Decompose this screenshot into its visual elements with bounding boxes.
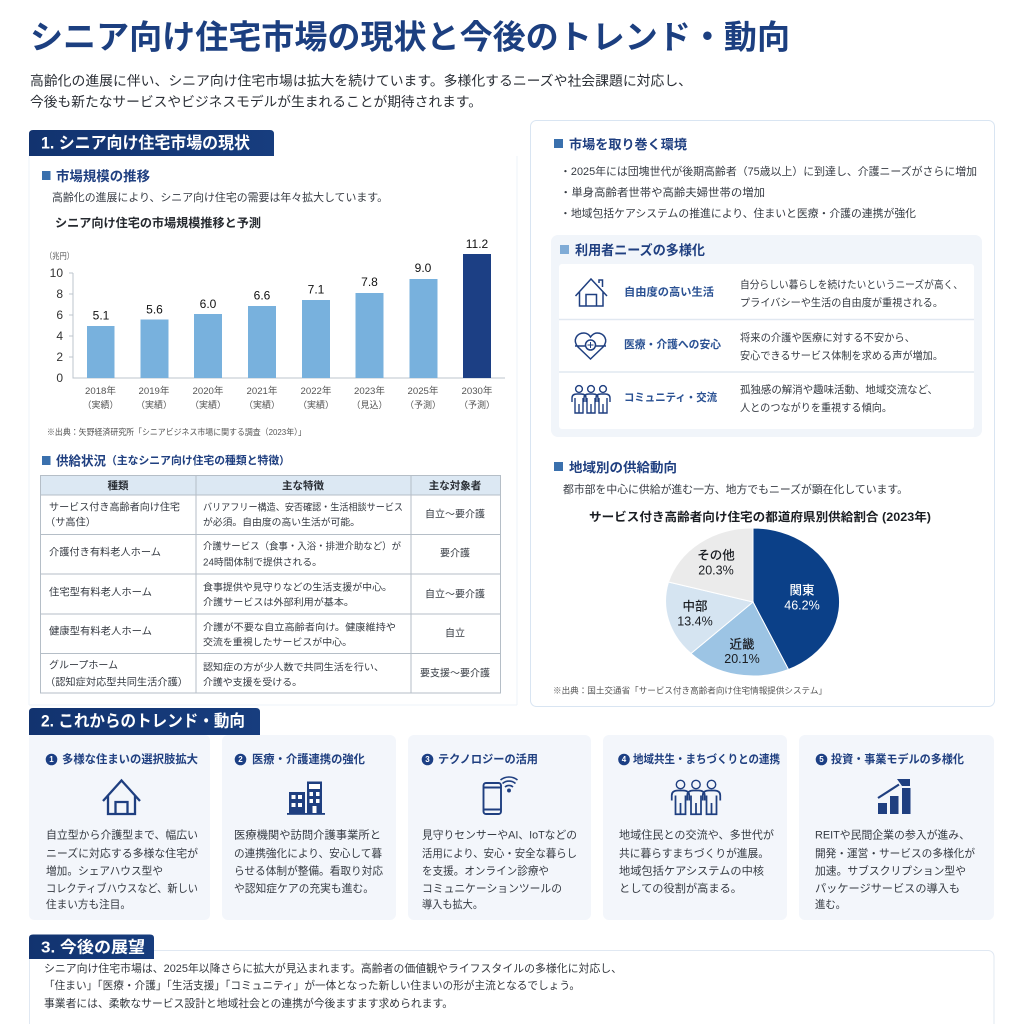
card 1 text: 増加。シェアハウス型や <box>46 864 163 878</box>
need: community <box>572 383 938 414</box>
subheading: regional supply: 地域別の供給動向 <box>569 460 677 475</box>
card 1 text: 自立型から介護型まで、幅広い <box>46 828 198 842</box>
card 2 text: らせる体制が整備。看取り対応 <box>234 864 383 878</box>
icon: people <box>572 386 610 413</box>
table column: features: 24時間体制で提供される。 <box>203 556 322 569</box>
y axis <box>45 251 505 385</box>
icon: growth chart <box>878 779 910 814</box>
slice labels: 関東 <box>789 583 815 598</box>
bar values: 11.2 <box>466 237 489 251</box>
table column: features <box>203 501 403 689</box>
chart title: シニア向け住宅の市場規模推移と予測 <box>55 215 261 230</box>
card 3 text: コミュニケーションツールの <box>422 882 562 895</box>
subheading: supply: （主なシニア向け住宅の種類と特徴） <box>106 453 290 467</box>
table column: features: 認知症の方が少人数で共同生活を行い、 <box>203 661 384 674</box>
section 2 header: 2. これからのトレンド・動向 <box>41 712 245 731</box>
icon: people <box>672 780 720 814</box>
card 4 text: 地域住民との交流や、多世代が <box>619 828 774 842</box>
icon: building <box>287 782 325 815</box>
chart source: ※出典：矢野経済研究所「シニアビジネス市場に関する調査（2023年）」 <box>47 427 306 437</box>
bar values: 5.1 <box>93 309 110 323</box>
slice labels: 中部 <box>682 599 708 614</box>
subheading: market size: 市場規模の推移 <box>56 168 150 184</box>
x axis labels: 2025年 <box>408 385 439 397</box>
card 3 heading: 3 <box>425 755 430 764</box>
x axis labels: （予測） <box>459 399 495 410</box>
bar values: 7.8 <box>361 275 378 289</box>
card 4: community development <box>603 735 787 920</box>
table column: type: （認知症対応型共同生活介護） <box>45 676 188 689</box>
card 5 text: 進む。 <box>815 898 846 911</box>
slice labels: 近畿 <box>729 637 755 652</box>
table column: target: 自立 <box>445 627 465 640</box>
card 3 text: 活用により、安心・安全な暮らし <box>422 846 577 860</box>
slice labels: 13.4% <box>677 615 713 629</box>
bar values: 6.6 <box>254 289 271 303</box>
card 5 text <box>815 828 975 911</box>
table column: type: グループホーム <box>49 659 118 672</box>
pie chart: supply share <box>666 528 840 676</box>
section 2 header <box>29 708 260 735</box>
outlook text: 「住まい」「医療・介護」「生活支援」「コミュニティ」が一体となった新しい住まいの形が主流となるでしょう。 <box>44 978 580 992</box>
y axis: （兆円） <box>45 251 74 261</box>
environment bullets <box>560 165 977 220</box>
table column: target: 要介護 <box>440 547 470 560</box>
slice labels: 20.1% <box>724 652 760 666</box>
subheading: supply <box>42 453 290 469</box>
table column: target <box>420 508 490 680</box>
section 1 header: 1. シニア向け住宅市場の現状 <box>41 133 250 153</box>
table column: features: 食事提供や見守りなどの生活支援が中心。 <box>203 581 392 594</box>
card 4 text <box>619 828 774 895</box>
panel: right column <box>530 120 994 706</box>
card 3 text: を支援。オンライン診療や <box>422 864 549 878</box>
need: medical care: 安心できるサービス体制を求める声が増加。 <box>740 349 943 362</box>
y axis: 0 <box>56 371 63 385</box>
table column: type: 健康型有料老人ホーム <box>49 625 152 638</box>
user needs heading: 利用者ニーズの多様化 <box>575 242 705 258</box>
outlook text <box>44 961 622 1010</box>
need: freedom: プライバシーや生活の自由度が重視される。 <box>740 296 943 309</box>
icon: heart <box>575 333 606 359</box>
card 1 text: 住まい方も注目。 <box>46 897 131 911</box>
table column: features: バリアフリー構造、安否確認・生活相談サービス <box>203 501 403 514</box>
table column: type: サービス付き高齢者向け住宅 <box>49 501 180 514</box>
bar values <box>93 237 489 323</box>
outlook text: シニア向け住宅市場は、2025年以降さらに拡大が見込まれます。高齢者の価値観やライフスタイルの多様化に対応し、 <box>44 961 622 975</box>
x axis labels: 2022年 <box>301 385 332 397</box>
slice labels <box>677 549 820 666</box>
card 1 heading: 多様な住まいの選択肢拡大 <box>62 752 198 766</box>
card 5 heading: 5 <box>819 755 824 764</box>
title: シニア向け住宅市場の現状と今後のトレンド・動向 <box>30 19 790 56</box>
card 5: investment models <box>799 735 994 920</box>
need: community: コミュニティ・交流 <box>624 390 717 404</box>
card 5 text: REITや民間企業の参入が進み、 <box>815 828 970 842</box>
card 1 text: ニーズに対応する多様な住宅が <box>46 846 198 860</box>
need: freedom: 自由度の高い生活 <box>624 285 714 299</box>
section 3 header <box>29 934 154 959</box>
icon: phone with wifi <box>484 777 518 814</box>
card 2 heading: 医療・介護連携の強化 <box>252 752 366 766</box>
slice labels: 46.2% <box>784 599 820 613</box>
table column: target: 自立〜要介護 <box>425 508 485 521</box>
x axis labels: （実績） <box>298 399 334 410</box>
card 2 text: 医療機関や訪問介護事業所と <box>234 828 381 842</box>
x axis labels: （実績） <box>82 399 119 410</box>
need: freedom <box>576 278 963 309</box>
card 1 text: コレクティブハウスなど、新しい <box>46 881 198 895</box>
x axis labels: （予測） <box>405 399 441 410</box>
panel: user needs <box>551 235 982 437</box>
x axis labels: 2030年 <box>462 385 493 397</box>
x axis labels: （実績） <box>136 399 172 410</box>
intro text: 今後も新たなサービスやビジネスモデルが生まれることが期待されます。 <box>30 94 482 110</box>
bar values: 7.1 <box>308 283 325 297</box>
card 3 heading: テクノロジーの活用 <box>438 752 538 766</box>
table column: features: 介護サービスは外部利用が基本。 <box>203 596 354 609</box>
card 2 text: の連携強化により、安心して暮 <box>234 846 382 860</box>
table column: features: 介護や支援を受ける。 <box>203 676 302 689</box>
section 3 header: 3. 今後の展望 <box>41 938 145 957</box>
table column: features: が必須。自由度の高い生活が可能。 <box>203 516 360 529</box>
intro text <box>30 73 692 110</box>
subheading: supply: 供給状況 <box>56 454 106 469</box>
table column: type: （サ高住） <box>45 516 96 529</box>
y axis: 6 <box>56 308 63 322</box>
panel: section 1 market status <box>29 130 517 705</box>
panel: section 3 outlook <box>29 934 994 1024</box>
card 4 heading: 地域共生・まちづくりとの連携 <box>633 752 780 766</box>
x axis labels: 2019年 <box>139 385 170 397</box>
y axis: 2 <box>56 350 63 364</box>
icon: house <box>103 780 140 814</box>
card 3 text <box>422 829 577 911</box>
environment bullets: ・2025年には団塊世代が後期高齢者（75歳以上）に到達し、介護ニーズがさらに増加 <box>560 165 977 178</box>
need: medical care: 医療・介護への安心 <box>624 337 721 351</box>
need: freedom: 自分らしい暮らしを続けたいというニーズが高く、 <box>740 278 963 291</box>
x axis labels: 2020年 <box>193 385 224 397</box>
card 5 text: パッケージサービスの導入も <box>815 881 960 895</box>
slice labels: 20.3% <box>698 564 734 578</box>
table header <box>108 479 481 492</box>
x axis labels: 2021年 <box>247 385 278 397</box>
x axis labels: （実績） <box>244 399 280 410</box>
need: medical care <box>575 331 943 362</box>
intro text: 高齢化の進展に伴い、シニア向け住宅市場は拡大を続けています。多様化するニーズや社会課題に対応し、 <box>30 73 692 89</box>
table column: target: 自立〜要介護 <box>425 588 485 601</box>
pie chart title: サービス付き高齢者向け住宅の都道府県別供給割合 (2023年) <box>589 509 931 524</box>
x axis labels: （実績） <box>190 399 226 410</box>
x axis labels: 2023年 <box>354 385 385 397</box>
bar values: 6.0 <box>200 297 217 311</box>
card 4 text: 共に暮らすまちづくりが進展。 <box>619 846 769 860</box>
y axis: 4 <box>56 329 63 343</box>
card 2 text <box>234 828 383 895</box>
card 5 heading: 投資・事業モデルの多様化 <box>831 752 965 766</box>
card 5 text: 加速。サブスクリプション型や <box>815 864 966 878</box>
card 2 heading: 2 <box>238 755 243 764</box>
table header: 主な対象者 <box>429 479 481 492</box>
y axis: 10 <box>50 266 63 280</box>
environment bullets: ・地域包括ケアシステムの推進により、住まいと医療・介護の連携が強化 <box>560 207 916 220</box>
card 3: technology <box>408 735 591 920</box>
table: housing types <box>40 476 500 693</box>
need: community: 孤独感の解消や趣味活動、地域交流など、 <box>740 383 938 396</box>
environment bullets: ・単身高齢者世帯や高齢夫婦世帯の増加 <box>560 186 765 199</box>
table header: 主な特徴 <box>282 479 324 492</box>
pie chart source: ※出典：国土交通省「サービス付き高齢者向け住宅情報提供システム」 <box>553 686 827 696</box>
x axis labels: （見込） <box>351 400 388 410</box>
card 1 heading: 1 <box>49 755 54 764</box>
need: medical care: 将来の介護や医療に対する不安から、 <box>740 331 915 344</box>
need: community: 人とのつながりを重視する傾向。 <box>740 401 892 414</box>
table column: type: 住宅型有料老人ホーム <box>49 586 152 599</box>
section 1 header <box>29 130 274 156</box>
table column: type <box>45 501 188 689</box>
card 4 text: 地域包括ケアシステムの中核 <box>619 864 764 878</box>
card 4 text: としての役割が高まる。 <box>619 881 742 895</box>
card 2 text: や認知症ケアの充実も進む。 <box>234 881 374 895</box>
market size description: 高齢化の進展により、シニア向け住宅の需要は年々拡大しています。 <box>52 191 388 204</box>
card 1 text <box>46 828 198 911</box>
outlook text: 事業者には、柔軟なサービス設計と地域社会との連携が今後ますます求められます。 <box>44 996 453 1010</box>
card 4 heading: 4 <box>622 755 627 764</box>
subheading: environment: 市場を取り巻く環境 <box>569 137 687 152</box>
y axis: 8 <box>56 287 63 301</box>
table column: features: 交流を重視したサービスが中心。 <box>203 636 352 649</box>
bar values: 5.6 <box>146 303 163 317</box>
card 5 text: 開発・運営・サービスの多様化が <box>815 846 975 860</box>
slice labels: その他 <box>697 549 735 563</box>
table column: features: 介護が不要な自立高齢者向け。健康維持や <box>203 621 396 634</box>
bar chart: market size <box>45 215 505 410</box>
table column: target: 要支援〜要介護 <box>420 667 490 680</box>
table header: 種類 <box>108 479 129 492</box>
x axis labels: 2018年 <box>85 385 116 397</box>
card 2: medical collaboration <box>222 735 396 920</box>
regional supply description: 都市部を中心に供給が進む一方、地方でもニーズが顕在化しています。 <box>563 483 908 496</box>
icon: house <box>576 279 607 306</box>
card 3 text: 導入も拡大。 <box>422 897 483 911</box>
card 1: housing options <box>29 735 210 920</box>
bars <box>87 254 491 378</box>
card 3 text: 見守りセンサーやAI、IoTなどの <box>422 829 577 842</box>
bar values: 9.0 <box>415 261 432 275</box>
x axis labels <box>82 385 495 410</box>
table column: type: 介護付き有料老人ホーム <box>49 546 161 559</box>
table column: features: 介護サービス（食事・入浴・排泄介助など）が <box>203 540 401 553</box>
